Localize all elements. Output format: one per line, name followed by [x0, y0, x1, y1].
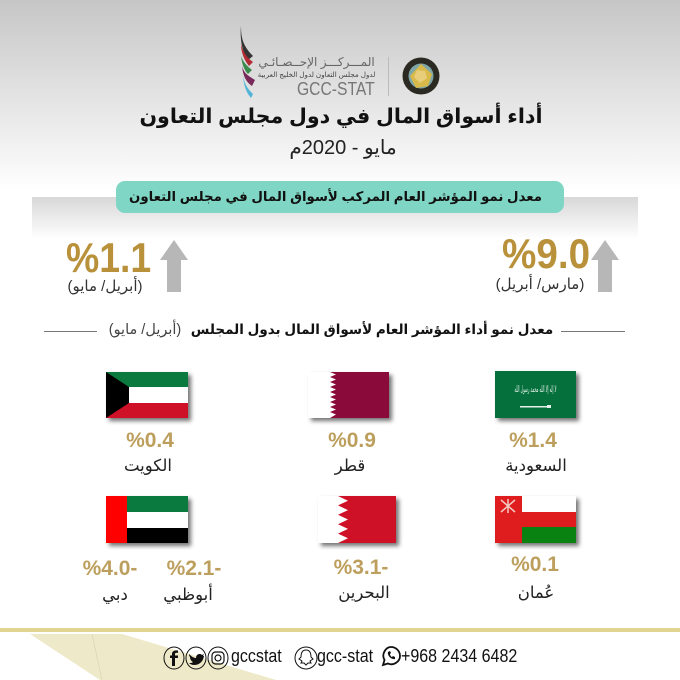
name: Saudi Arabia: السعودية	[505, 457, 567, 475]
flag: Saudi Arabia: لا إله إلا الله محمد رسول الله	[514, 385, 556, 395]
icon: ribbon mark	[240, 26, 255, 98]
arrow up	[160, 240, 188, 292]
name: Kuwait: الكويت	[124, 457, 172, 475]
flag: Saudi Arabia	[495, 371, 582, 424]
flag: UAE	[106, 496, 194, 549]
footer social row	[164, 646, 517, 670]
value: %9.0	[502, 230, 590, 277]
footer decorative shape	[30, 634, 276, 680]
stat: March/April	[496, 230, 619, 293]
value: Kuwait: %0.4	[126, 429, 174, 452]
name: Abu Dhabi: أبوظبي	[163, 586, 213, 604]
icon: facebook	[164, 646, 184, 670]
flag: Oman	[495, 496, 582, 549]
logo: GCC-STAT	[240, 26, 440, 99]
value: Qatar: %0.9	[328, 429, 376, 452]
title: أداء أسواق المال في دول مجلس التعاون	[139, 105, 543, 128]
period label: (مارس/ أبريل)	[496, 276, 584, 293]
value: Abu Dhabi: %2.1-	[167, 557, 221, 580]
name: Qatar: قطر	[335, 457, 365, 475]
icon: twitter	[186, 646, 206, 670]
stat: April/May	[66, 234, 188, 295]
icon: instagram	[208, 646, 228, 670]
heading text: معدل نمو أداء المؤشر العام لأسواق المال بدول المجلس	[191, 322, 553, 337]
name: Oman: عُمان	[518, 584, 554, 602]
flag: Bahrain	[318, 496, 402, 549]
section heading with rules	[44, 320, 625, 338]
subtitle date: مايو - 2020م	[289, 137, 397, 159]
flag: Kuwait	[106, 372, 194, 424]
logo GCC-STAT wordmark: GCC-STAT	[297, 79, 375, 99]
footer gold rule	[0, 628, 680, 632]
divider	[388, 57, 389, 96]
band background gradient	[32, 197, 638, 239]
arrow up	[591, 240, 619, 292]
heading rule right	[561, 331, 625, 332]
name: Bahrain: البحرين	[338, 584, 390, 602]
flag: Qatar	[308, 372, 395, 424]
handle gcc-stat: gcc-stat	[317, 646, 373, 666]
banner: composite index	[116, 181, 564, 213]
value: %1.1	[66, 234, 151, 281]
heading rule left	[44, 331, 97, 332]
icon: GCC emblem	[402, 58, 440, 94]
heading period: (أبريل/ مايو)	[109, 322, 181, 338]
period label: (أبريل/ مايو)	[67, 278, 143, 295]
value: Bahrain: %3.1-	[334, 556, 388, 579]
icon: snapchat	[294, 646, 318, 670]
value: Saudi Arabia: %1.4	[509, 429, 557, 452]
value: Oman: %0.1	[511, 553, 559, 576]
phone number: +968 2434 6482	[401, 646, 517, 666]
top background gradient	[0, 0, 680, 190]
logo Arabic name: المـــركـــز الإحــصـائـي	[258, 55, 375, 69]
logo Arabic subtitle: لدول مجلس التعاون لدول الخليج العربية	[258, 70, 375, 79]
handle gccstat: gccstat	[231, 646, 282, 666]
name: Dubai: دبي	[102, 586, 128, 604]
icon: whatsapp	[382, 646, 401, 666]
value: Dubai: %4.0-	[83, 557, 137, 580]
banner text: معدل نمو المؤشر العام المركب لأسواق المال في مجلس التعاون	[129, 189, 542, 204]
